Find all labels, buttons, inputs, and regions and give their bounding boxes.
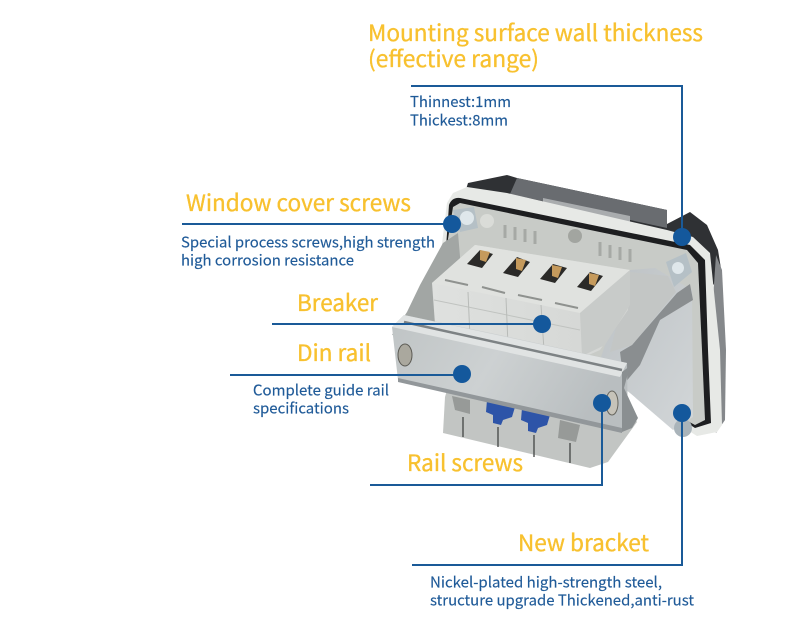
slatted wall ribs (505, 225, 630, 262)
lower breaker (443, 380, 637, 468)
marker dot (593, 394, 611, 412)
leader line (182, 223, 452, 225)
marker dot (443, 215, 461, 233)
heading second line: (effective range) (368, 41, 539, 74)
product photo: enclosure window assembly (392, 175, 726, 468)
callout: din rail (230, 335, 471, 418)
right metal bracket (600, 268, 693, 430)
heading: New bracket (518, 525, 649, 558)
din rail screws (398, 344, 412, 366)
heading: Rail screws (407, 445, 523, 478)
heading: Mounting surface wall thickness (368, 15, 703, 48)
callout: breaker (272, 285, 551, 333)
leader line (412, 414, 682, 565)
marker dot (673, 228, 691, 246)
interior wall (440, 203, 705, 425)
leader line (230, 374, 462, 376)
left flank of bracket (392, 233, 462, 340)
white frame (440, 187, 722, 436)
marker dot (453, 365, 471, 383)
heading: Din rail (297, 335, 371, 368)
rear cover lower edge (706, 255, 726, 433)
breaker (432, 245, 630, 358)
leader line (411, 86, 682, 236)
rear cover (450, 175, 722, 300)
description second line: high corrosion resistance (181, 250, 354, 270)
description second line: Thickest:8mm (410, 110, 508, 130)
heading: Breaker (297, 285, 378, 318)
window screw right (666, 253, 692, 287)
leader line (272, 323, 542, 325)
description: Nickel-plated high-strength steel, (430, 572, 662, 592)
callout: new bracket (412, 404, 694, 610)
din rail (392, 315, 628, 432)
description second line: specifications (253, 398, 349, 418)
description second line: structure upgrade Thickened,anti-rust (430, 590, 694, 610)
description: Special process screws,high strength (181, 232, 435, 252)
bracket screw (674, 419, 692, 437)
description: Thinnest:1mm (410, 91, 511, 112)
window screw left (453, 207, 478, 232)
blue clips (486, 400, 515, 425)
breaker terminals (467, 250, 603, 291)
marker dot (533, 315, 551, 333)
callout: rail screws (370, 394, 611, 485)
description: Complete guide rail (253, 380, 389, 400)
callout: window cover screws (181, 185, 461, 270)
leader line (370, 404, 602, 485)
marker dot (673, 404, 691, 422)
black gasket (445, 198, 711, 428)
heading: Window cover screws (186, 185, 411, 218)
callout: mounting surface wall thickness (368, 15, 703, 246)
